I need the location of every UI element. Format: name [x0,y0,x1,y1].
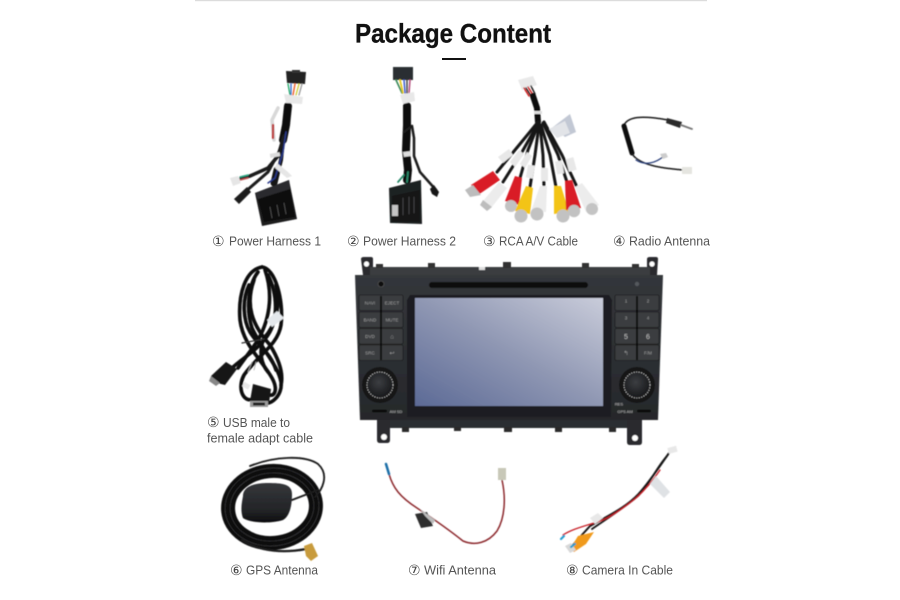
item 4: radio antenna [613,117,711,250]
icon: power harness 2 [389,67,439,224]
label: camera in cable: ⑧ [566,563,579,579]
icon: camera in cable [561,446,678,553]
label: radio antenna: Radio Antenna [629,234,711,248]
item 8: camera in cable [561,446,678,579]
right buttons: 5 [624,334,628,341]
icon: usb cable [209,267,284,407]
left buttons: BAND [364,318,377,322]
left buttons: ↩ [389,351,395,357]
label: rca a/v cable: ③ [483,234,496,250]
left knob [362,367,398,403]
left buttons: MUTE [385,318,399,322]
right knob [619,367,655,403]
label: usb cable [207,415,313,446]
icon: wifi antenna [386,464,506,543]
item 3: rca a/v cable [465,76,599,250]
label: power harness 1: Power Harness 1 [229,234,321,248]
label: usb cable: female adapt cable [207,430,313,446]
title: Package Content [355,18,551,48]
label: camera in cable: Camera In Cable [582,562,673,578]
left buttons: ⌂ [390,334,394,340]
item 6: gps antenna [222,458,324,579]
item 1: power harness 1 [212,70,321,250]
label: gps antenna: GPS Antenna [246,562,319,578]
label: rca a/v cable: RCA A/V Cable [499,234,578,248]
label: power harness 2: ② [347,234,360,250]
item 2: power harness 2 [347,67,456,250]
item 7: wifi antenna [386,464,506,579]
faceplate [355,275,663,420]
card slots [372,402,651,414]
icon: rca cable [465,76,599,222]
label: power harness 1: ① [212,234,225,250]
card slots: GPS AM [617,409,633,414]
left buttons: NAVI [365,300,375,306]
item 5: usb cable [207,267,313,446]
label: wifi antenna: ⑦ [408,563,421,579]
bezel [407,295,612,417]
label: usb cable: USB male to [223,415,290,430]
icon: radio antenna [624,117,692,174]
right buttons: 6 [646,334,650,341]
right buttons: F/M [644,350,652,356]
left buttons [359,295,403,360]
right buttons: ↰ [623,350,629,357]
label: rca a/v cable [483,234,578,250]
label: radio antenna: ④ [613,234,626,250]
right buttons [615,295,659,360]
left buttons: DVD [365,334,376,339]
mounting brackets [361,257,658,445]
head unit [355,257,663,445]
right buttons: 4 [647,316,650,320]
card slots: AM SD [390,409,402,414]
label: wifi antenna: Wifi Antenna [424,562,497,578]
left buttons: EJECT [385,300,399,306]
label: usb cable: ⑤ [207,415,220,431]
right buttons: 1 [625,298,628,304]
label: gps antenna: ⑥ [230,563,243,579]
label: power harness 2: Power Harness 2 [363,234,456,248]
right buttons: 2 [647,298,650,304]
icon: power harness 1 [230,70,306,226]
icon: gps antenna [222,458,324,561]
card slots: RES [615,402,623,406]
left buttons: SRC [365,350,376,356]
disc slot [429,282,588,288]
screen [415,298,603,406]
right buttons: 3 [625,316,628,320]
